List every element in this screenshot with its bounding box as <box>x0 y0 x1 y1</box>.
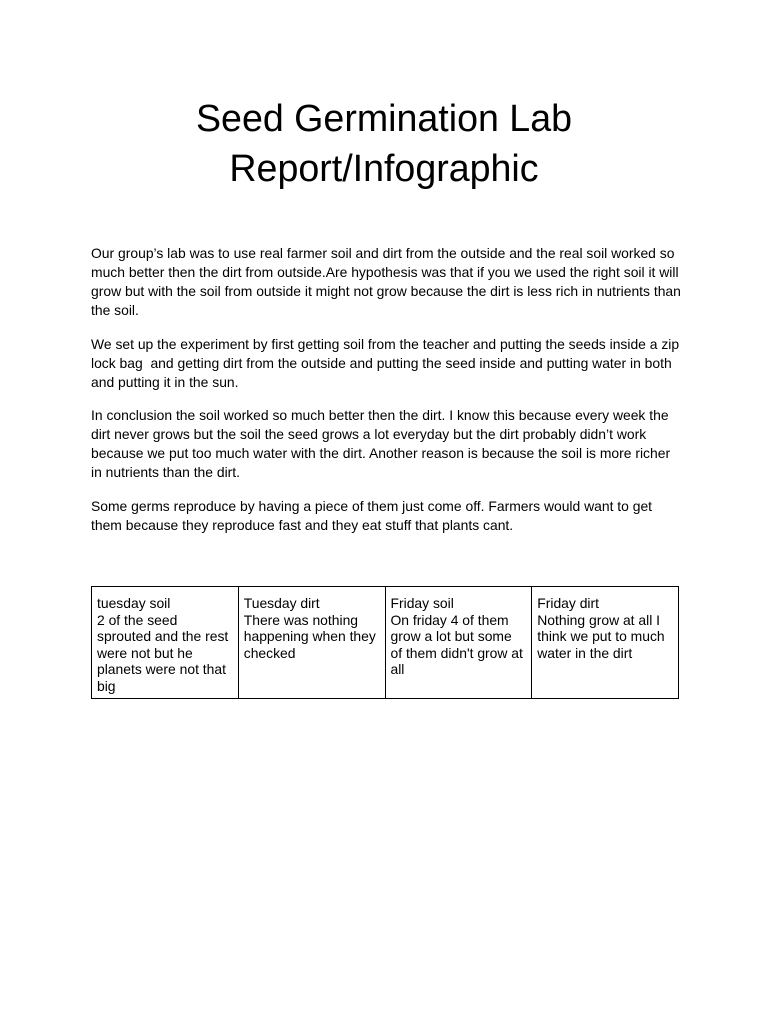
paragraph: hypothesis: the soil. <box>91 302 139 318</box>
paragraph: hypothesis: much better then the dirt from outside.Are hypothesis was that if you we used the right soil it will <box>91 264 679 280</box>
paragraph: setup: and putting it in the sun. <box>91 374 238 390</box>
table: observations: were not but he <box>97 645 193 661</box>
table: observations: tuesday soil <box>97 595 170 611</box>
table: observations: planets were not that <box>97 661 226 677</box>
table: observations: of them didn't grow at <box>390 645 523 661</box>
table: observations: big <box>97 678 116 694</box>
paragraph: conclusion: dirt never grows but the soil the seed grows a lot everyday but the dirt probably didn’t work <box>91 426 646 442</box>
paragraph: conclusion: In conclusion the soil worked so much better then the dirt. I know this because every week the <box>91 407 669 423</box>
title: Report/Infographic <box>229 147 539 189</box>
table: observations: happening when they <box>244 628 376 644</box>
table: observations <box>91 586 679 699</box>
paragraph: hypothesis: grow but with the soil from outside it might not grow because the dirt is less rich in nutrients than <box>91 283 681 299</box>
paragraph: conclusion: because we put too much water with the dirt. Another reason is because the soil is more richer <box>91 445 670 461</box>
paragraph: germs: Some germs reproduce by having a piece of them just come off. Farmers would want to get <box>91 498 652 514</box>
paragraph: conclusion <box>91 407 670 480</box>
paragraph: setup <box>91 336 679 390</box>
table: observations: Nothing grow at all I <box>537 612 660 628</box>
title: Seed Germination Lab <box>196 97 572 139</box>
table: observations: On friday 4 of them <box>390 612 509 628</box>
table: observations: water in the dirt <box>537 645 632 661</box>
table: observations: checked <box>244 645 296 661</box>
table: observations: Tuesday dirt <box>244 595 320 611</box>
paragraph: hypothesis <box>91 245 681 318</box>
paragraph: conclusion: in nutrients than the dirt. <box>91 464 240 480</box>
table: observations: There was nothing <box>244 612 358 628</box>
table: observations: sprouted and the rest <box>97 628 228 644</box>
table: observations: think we put to much <box>537 628 665 644</box>
table: observations: grow a lot but some <box>390 628 512 644</box>
table: observations: all <box>390 661 404 677</box>
table: observations: Friday soil <box>390 595 454 611</box>
paragraph: germs <box>91 498 652 533</box>
paragraph: setup: We set up the experiment by first getting soil from the teacher and putting the seeds inside a zip <box>91 336 679 352</box>
table: observations: 2 of the seed <box>97 612 177 628</box>
paragraph: hypothesis: Our group’s lab was to use real farmer soil and dirt from the outside and the real soil worked so <box>91 245 674 261</box>
paragraph: germs: them because they reproduce fast and they eat stuff that plants cant. <box>91 517 513 533</box>
title <box>196 97 572 189</box>
paragraph: setup: lock bag and getting dirt from the outside and putting the seed inside and putting water in both <box>91 355 672 371</box>
table: observations: Friday dirt <box>537 595 599 611</box>
